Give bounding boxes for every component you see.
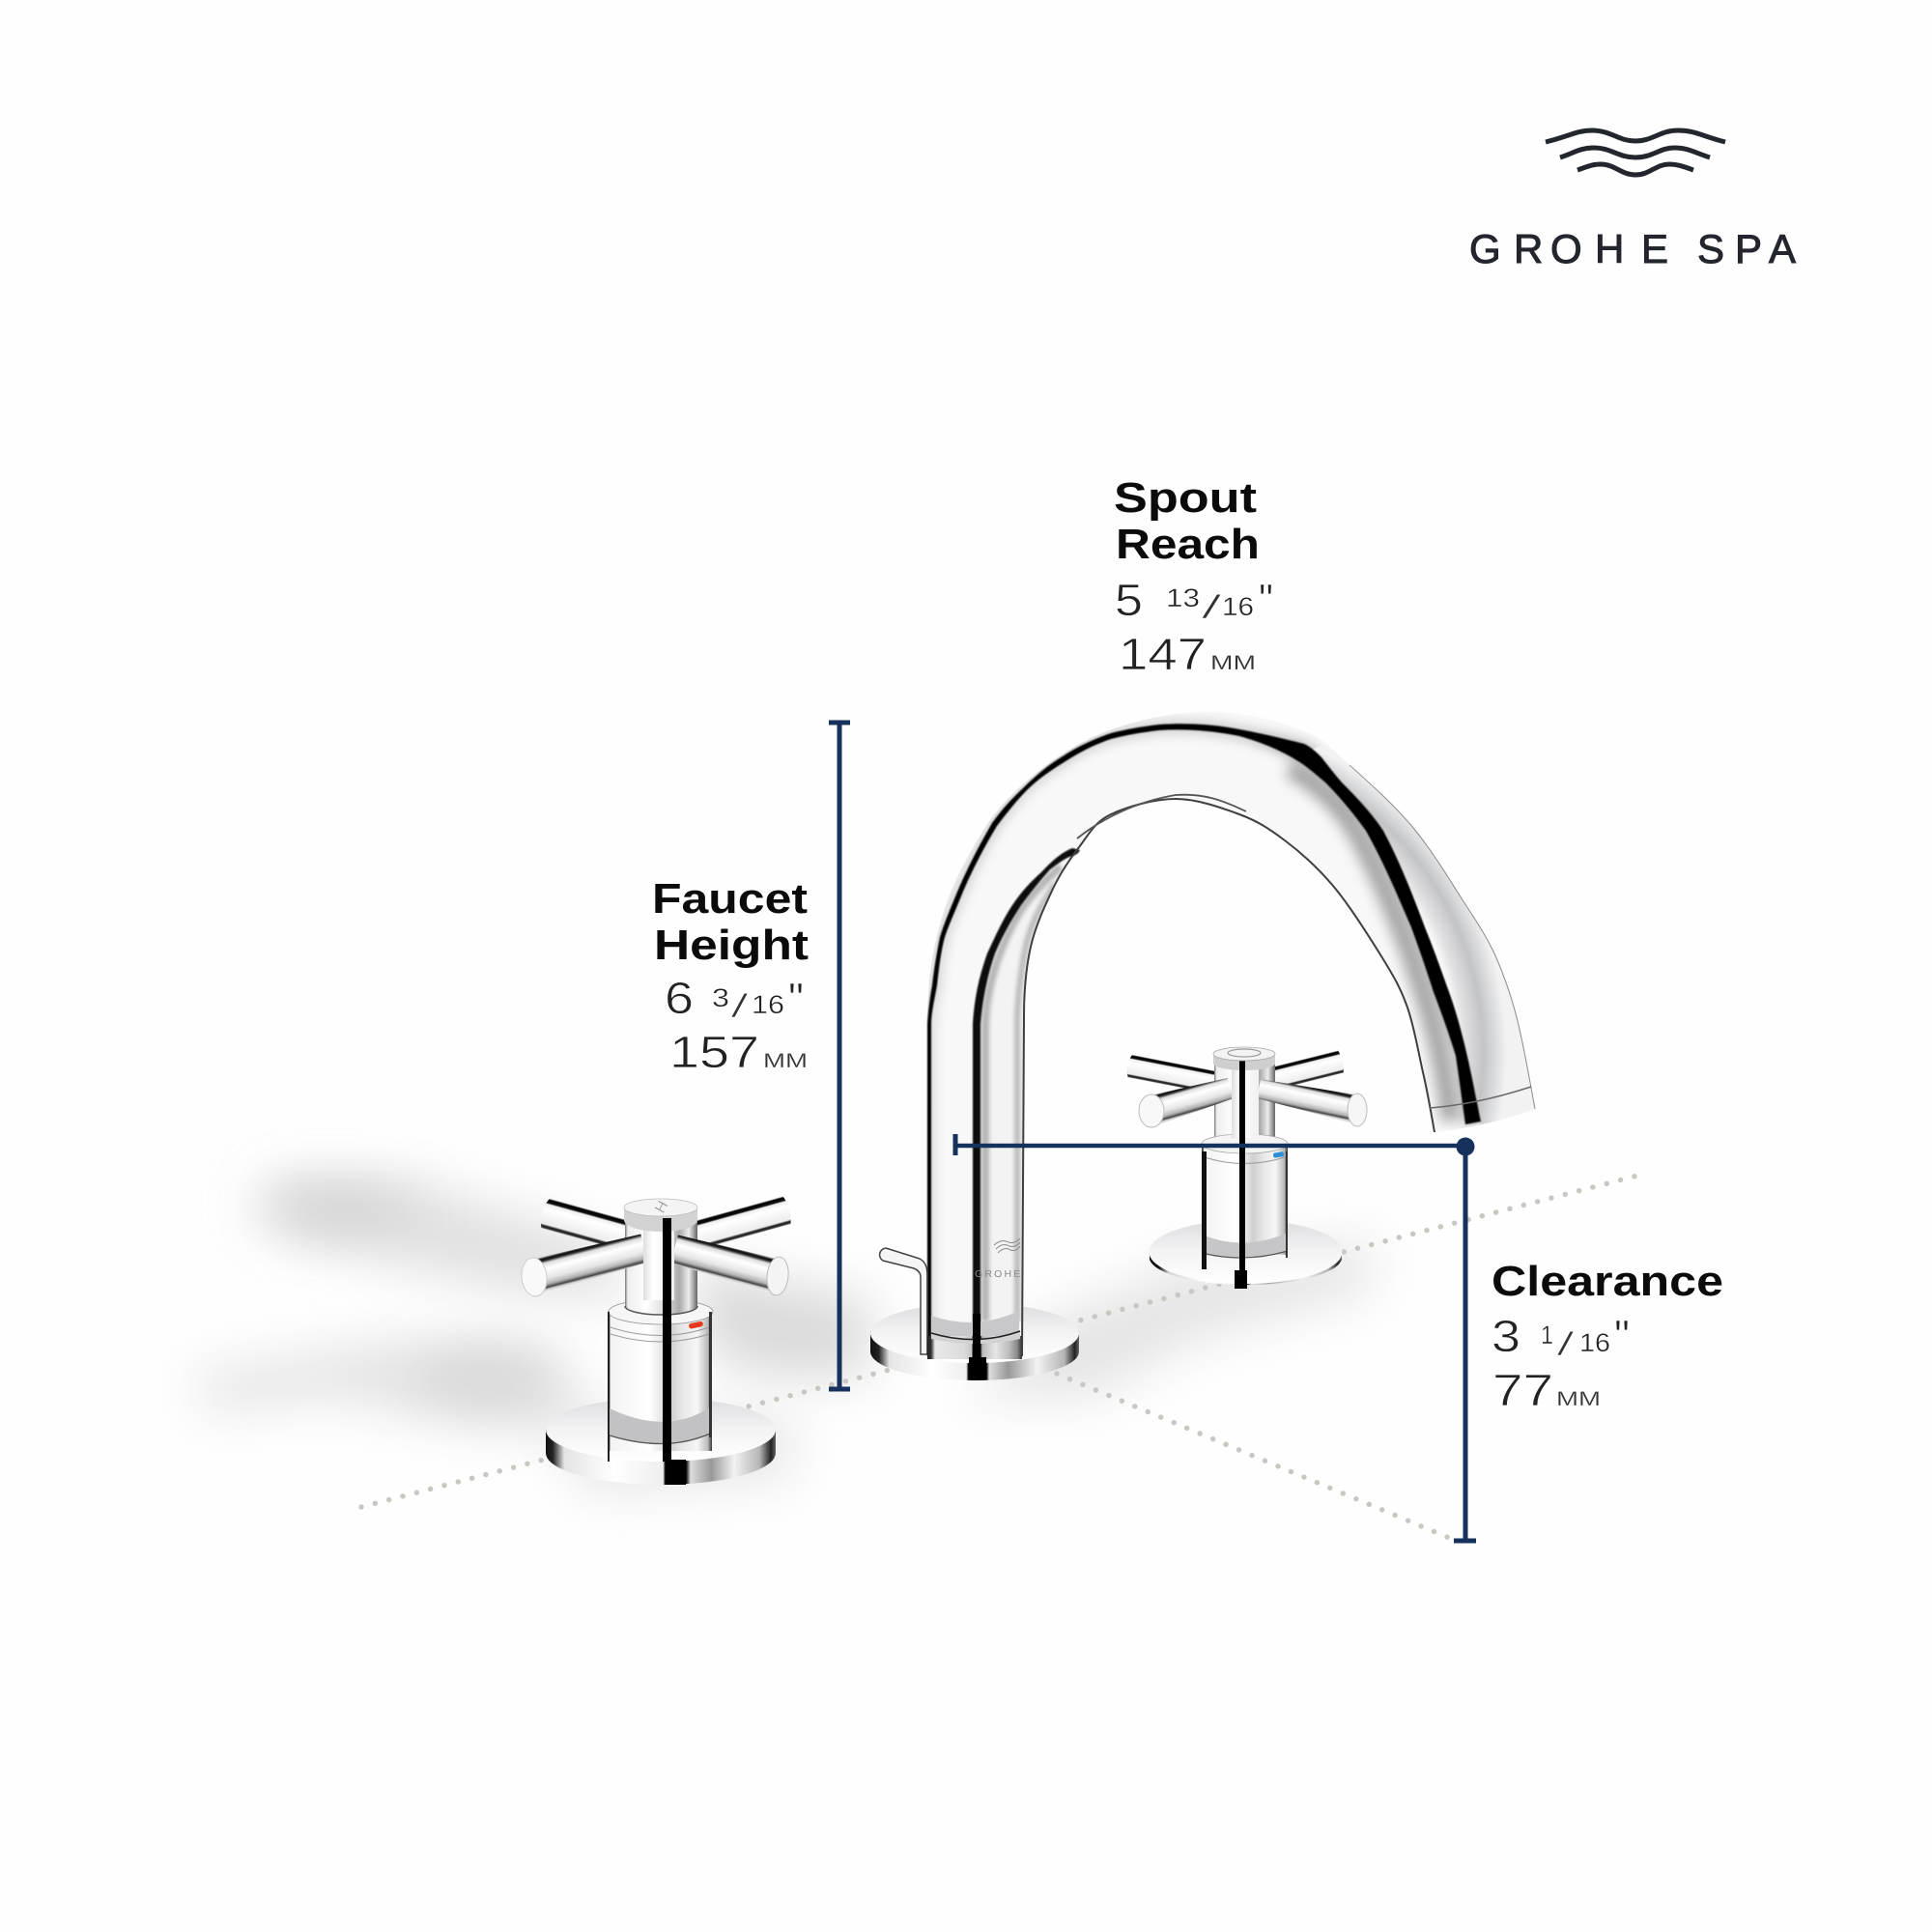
label: clearance: 16 xyxy=(1579,1328,1610,1357)
icon: waves xyxy=(1546,130,1725,175)
hot indicator mark xyxy=(689,1321,703,1329)
dimension line: spout reach xyxy=(955,1134,1474,1155)
label: spout reach: " xyxy=(1259,575,1273,625)
left handle hub and cap xyxy=(624,1199,697,1485)
left handle body xyxy=(608,1212,713,1462)
label: faucet height: 157 xyxy=(669,1027,759,1077)
spout underside tube xyxy=(980,845,1082,1321)
spout surface shading xyxy=(927,724,1538,1356)
label: clearance: " xyxy=(1614,1311,1630,1361)
label: faucet height: " xyxy=(788,974,804,1024)
dimension line: clearance xyxy=(1454,1147,1476,1542)
spout inner column stripe xyxy=(973,848,1080,1356)
label: spout reach: Reach xyxy=(1116,521,1260,568)
spout body xyxy=(927,712,1535,1356)
right handle hub and cap xyxy=(1213,1047,1275,1289)
label: spout reach: MM xyxy=(1210,652,1256,674)
spout dark reflection band xyxy=(927,724,1481,1356)
label: spout reach xyxy=(1114,474,1273,679)
right handle body xyxy=(1202,1056,1288,1269)
label: clearance: 3 xyxy=(1492,1311,1520,1361)
logo: Grohe Spa xyxy=(1469,130,1796,271)
label: faucet height: Faucet xyxy=(652,875,808,923)
label: spout reach: 13 xyxy=(1166,583,1200,612)
central spout xyxy=(870,712,1538,1380)
label: faucet height: / xyxy=(730,988,750,1025)
label: spout reach: 16 xyxy=(1222,592,1254,621)
right handle back arms xyxy=(1125,1050,1346,1094)
spout arch upper highlight line xyxy=(1077,795,1246,838)
right handle deck plate xyxy=(1150,1220,1343,1285)
label: faucet height: 16 xyxy=(752,990,784,1019)
label: clearance: / xyxy=(1556,1326,1576,1363)
dotted floor line: handle to handle xyxy=(361,1176,1637,1507)
faucet dimension diagram xyxy=(203,128,1797,1544)
label: clearance: Clearance xyxy=(1492,1258,1723,1305)
label: faucet height: Height xyxy=(654,922,809,969)
dotted floor line: spout base to clearance xyxy=(1057,1374,1454,1540)
left handle hub and cap: H xyxy=(652,1199,672,1216)
label: clearance: 77 xyxy=(1492,1365,1553,1415)
spout arch inner edge xyxy=(1022,799,1435,1356)
spout reflection halo xyxy=(927,724,1481,1356)
label: faucet height: 3 xyxy=(712,983,729,1012)
dimension line: faucet height xyxy=(829,722,850,1390)
spout nozzle outer panel xyxy=(1312,747,1507,1124)
spout base collar xyxy=(927,1311,1022,1378)
spout deck plate xyxy=(870,1303,1079,1380)
right handle front arms xyxy=(1139,1073,1367,1127)
label: spout reach: 5 xyxy=(1115,575,1143,625)
cold indicator mark xyxy=(1273,1151,1284,1158)
label: clearance: MM xyxy=(1556,1388,1601,1410)
left handle front arms xyxy=(520,1231,790,1297)
spout aerator ring xyxy=(1430,1087,1531,1108)
label: spout reach: Spout xyxy=(1114,474,1257,522)
label: faucet height xyxy=(652,875,809,1077)
label: spout reach: / xyxy=(1201,589,1223,626)
engraved spout logo: GROHE xyxy=(975,1268,1023,1280)
label: clearance: 1 xyxy=(1541,1321,1553,1350)
cast shadows xyxy=(193,1183,1372,1492)
pop-up drain lever xyxy=(880,1248,927,1354)
wordmark: GROHE SPA xyxy=(1469,226,1796,271)
label: spout reach: 147 xyxy=(1119,629,1207,679)
left handle back arms xyxy=(538,1196,793,1250)
right cross handle (cold) xyxy=(1125,1047,1367,1289)
label: clearance xyxy=(1492,1258,1723,1415)
engraved spout logo xyxy=(975,1238,1023,1280)
spout outer right contour xyxy=(1350,765,1535,1109)
spout inner shade beside band xyxy=(1290,768,1451,1121)
label: faucet height: MM xyxy=(763,1050,808,1072)
left cross handle (hot) xyxy=(520,1196,793,1485)
label: faucet height: 6 xyxy=(665,973,694,1023)
left handle deck plate xyxy=(546,1398,776,1485)
